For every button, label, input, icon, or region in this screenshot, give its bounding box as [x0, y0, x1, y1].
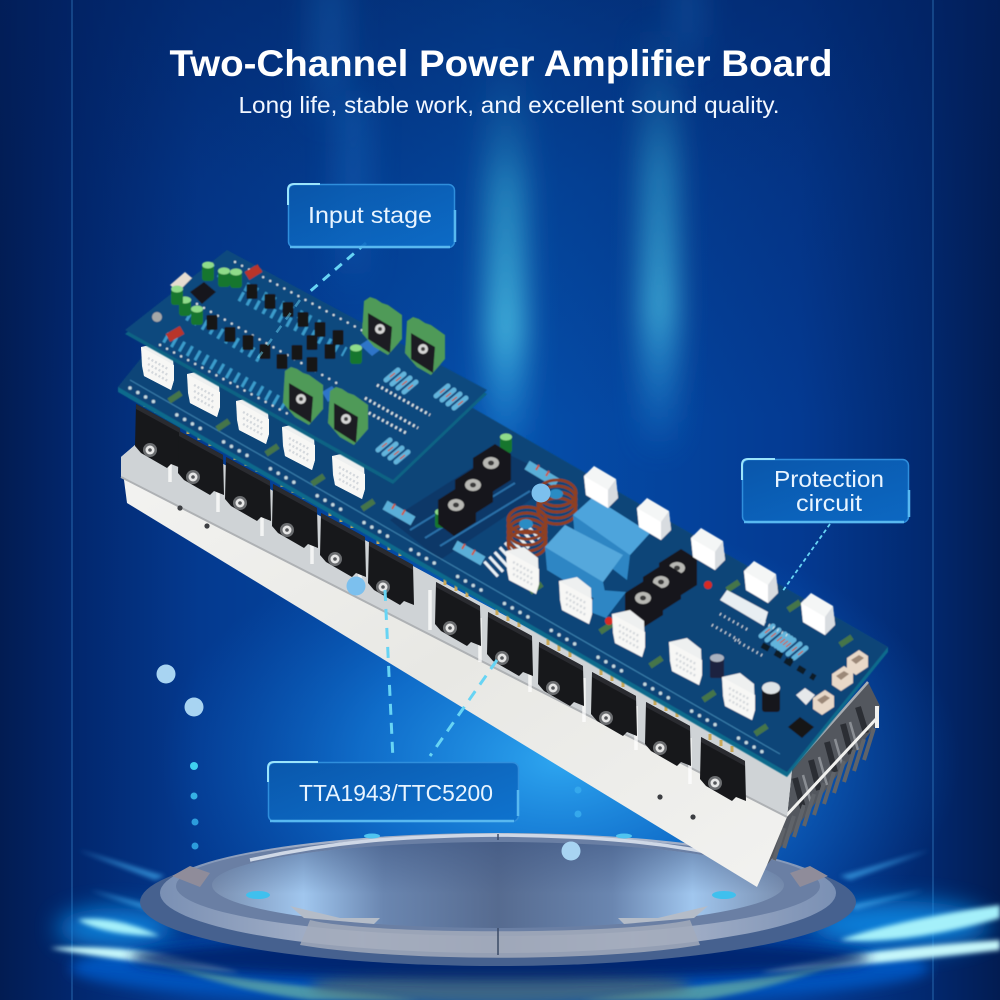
heatsink front block [121, 430, 792, 887]
upper board plate [125, 254, 487, 484]
heatsink holes [177, 505, 696, 820]
label: protection circuit: Protection [774, 466, 884, 492]
label: protection circuit: circuit [796, 490, 863, 516]
platform disc [140, 833, 856, 966]
label: TTA1943/TTC5200 [268, 762, 518, 822]
white power resistors, back row [584, 466, 618, 508]
board white stripes silkscreen [490, 528, 536, 570]
protection dashed line [782, 524, 830, 592]
subtitle: Long life, stable work, and excellent sound quality. [238, 92, 780, 118]
blue resistors [385, 465, 557, 561]
op amp and connector [190, 282, 216, 304]
inductor coils [508, 480, 576, 557]
label: input stage [288, 184, 455, 248]
main lower circuit board [118, 262, 888, 777]
decorative dots [156, 484, 582, 860]
pad strips along front edge [130, 388, 780, 762]
title: Two-Channel Power Amplifier Board [170, 43, 832, 84]
heatsink [121, 430, 880, 887]
header pins [360, 385, 430, 434]
white resistors under upper board [141, 343, 365, 499]
label: TTA1943/TTC5200: TTA1943/TTC5200 [299, 780, 493, 806]
board plate [118, 262, 888, 777]
label: input stage: Input stage [308, 202, 432, 228]
electrolytic capacitors [191, 306, 203, 325]
heatsink mounting face [121, 430, 792, 817]
resistor banks [386, 370, 416, 392]
screw terminal blocks [473, 444, 511, 494]
protection circuit components [605, 581, 868, 738]
small transistors [206, 284, 344, 372]
TO-220 devices [362, 297, 402, 355]
transistor dashed lines [385, 590, 497, 760]
label: protection circuit [742, 459, 909, 522]
input stage faint line over board [258, 300, 300, 358]
heatsink fins [767, 682, 880, 865]
inner disk [212, 842, 784, 928]
metal ring [160, 833, 836, 953]
input stage dashed line [300, 243, 366, 300]
outer plate [140, 838, 856, 966]
small green resistors [169, 393, 852, 734]
resistor rows [165, 268, 345, 405]
green capacitors [435, 508, 447, 528]
red capacitors [168, 268, 260, 338]
upper input-stage board [125, 250, 487, 484]
power transistors [135, 401, 746, 801]
blue relays [573, 497, 650, 580]
white power resistors, front row [506, 547, 539, 594]
trim pots [360, 337, 384, 356]
energy swoosh under platform [50, 850, 1000, 1000]
